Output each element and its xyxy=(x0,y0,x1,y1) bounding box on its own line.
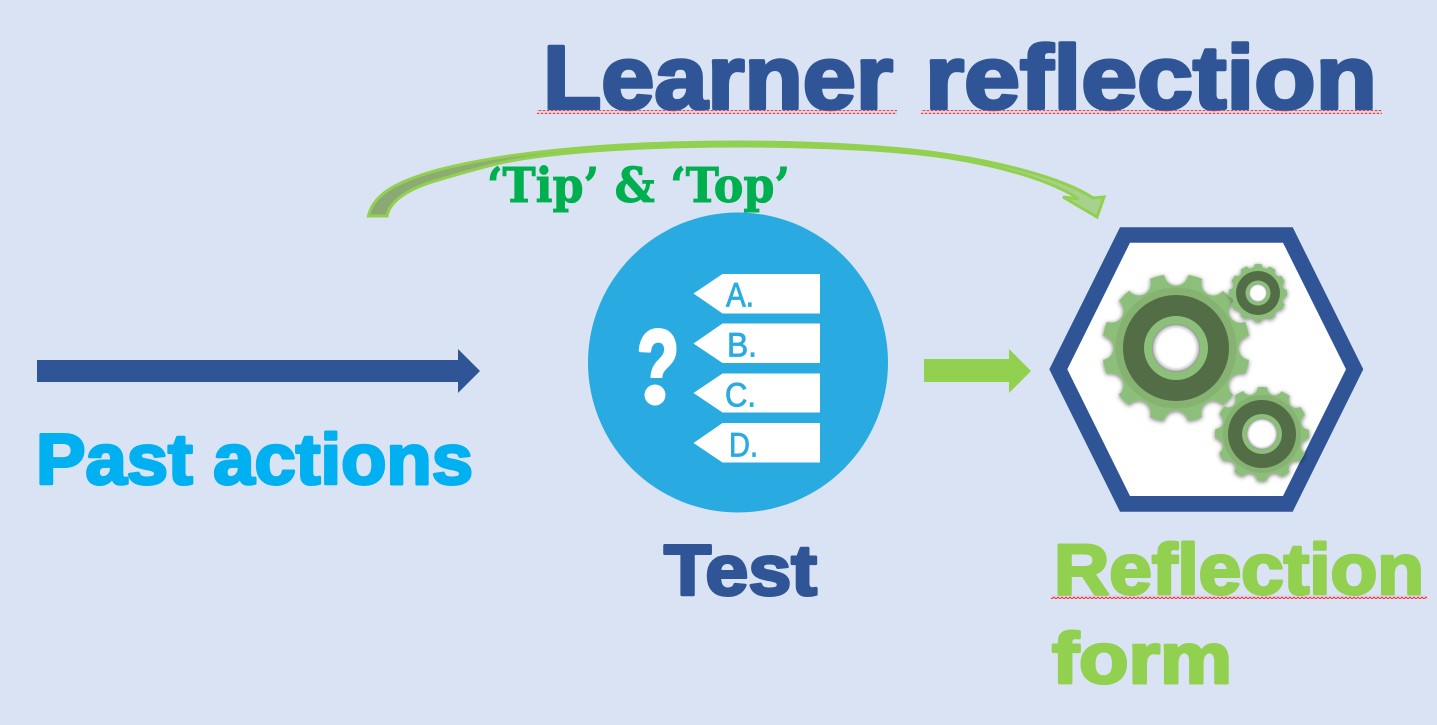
label: past actions: Past actions xyxy=(36,421,473,500)
label: Tip and Top: ‘Tip’ & ‘Top’ xyxy=(487,158,790,214)
icon: multiple choice test xyxy=(588,212,888,512)
icon: lower gear xyxy=(1215,387,1309,481)
option B xyxy=(694,324,820,364)
option A xyxy=(694,274,820,314)
label: reflection form: form xyxy=(1052,620,1232,699)
icon: hexagon with gears xyxy=(1049,227,1363,512)
option B: B. xyxy=(727,326,757,364)
arrow: test to reflection xyxy=(924,349,1031,393)
label: reflection form: Reflection xyxy=(1054,531,1424,610)
option D: D. xyxy=(729,426,758,464)
option D xyxy=(694,423,820,464)
label: test: Test xyxy=(664,532,817,611)
icon: small gear xyxy=(1229,264,1287,322)
title: reflection xyxy=(925,28,1377,128)
curved arrow: tip and top feedback xyxy=(368,142,1104,217)
arrow: past actions xyxy=(37,349,480,393)
option A: A. xyxy=(726,276,754,314)
option C: C. xyxy=(725,376,756,414)
icon: large gear xyxy=(1102,274,1250,422)
title xyxy=(537,28,1382,128)
option C xyxy=(694,374,820,414)
title: Learner xyxy=(543,28,893,128)
label: reflection form xyxy=(1051,531,1427,699)
icon: question mark: ? xyxy=(637,311,679,418)
